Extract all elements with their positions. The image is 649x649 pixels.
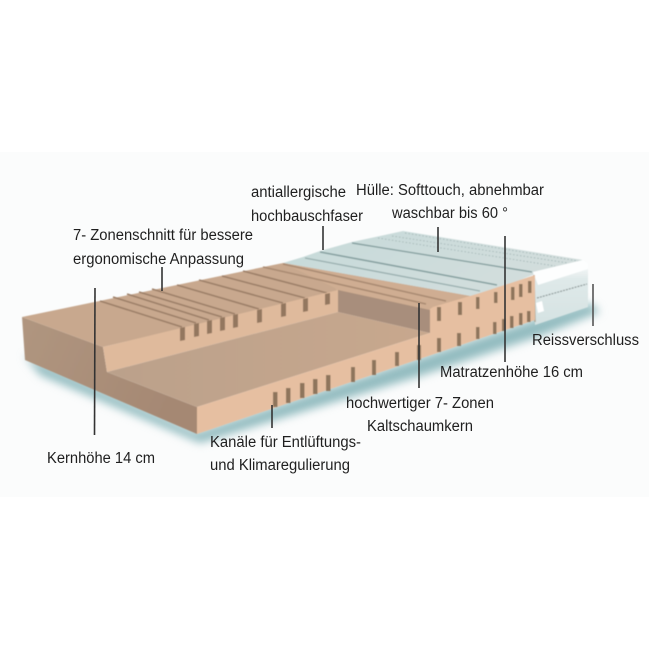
label: Kanäle: Kanäle für Entlüftungs- xyxy=(210,434,361,451)
foam: channels of lower row xyxy=(273,311,530,407)
foam: left side face xyxy=(22,317,197,434)
label: Kaltschaumkern: Kaltschaumkern xyxy=(367,418,473,435)
label: Hülle: waschbar bis 60 ° xyxy=(391,205,508,222)
mattress illustration xyxy=(22,231,588,434)
label: Zonenschnitt: 7- Zonenschnitt für bessere xyxy=(73,227,253,244)
label: Hülle: Hülle: Softtouch, abnehmbar xyxy=(356,182,544,199)
label: Matratzenhöhe: Matratzenhöhe 16 cm xyxy=(440,364,583,381)
foam: notches of upper row on right face xyxy=(437,281,532,321)
background panel xyxy=(0,152,649,497)
foam: lower floor xyxy=(107,312,430,407)
foam: lower front face xyxy=(197,275,535,434)
foam: front notches of upper step xyxy=(180,293,330,341)
label: Reissverschluss: Reissverschluss xyxy=(532,332,639,349)
foam: upper step top surface xyxy=(22,263,470,347)
foam: top grooves xyxy=(100,264,446,327)
label: antiallergische hochbauschfaser xyxy=(251,184,363,225)
cover: quilting and grooves xyxy=(305,233,578,291)
cover: top surface xyxy=(283,231,583,300)
foam: upper step front face xyxy=(103,290,338,372)
foam: right strip band xyxy=(283,263,470,312)
ground shadow xyxy=(24,303,600,443)
label: antiallergische hochbauschfaser: antiallergische xyxy=(251,184,346,201)
cover: side with zipper xyxy=(533,260,588,325)
label: antiallergische hochbauschfaser: hochbauschfaser xyxy=(251,208,363,225)
label: Kanäle: und Klimaregulierung xyxy=(210,457,350,474)
label: Zonenschnitt xyxy=(73,227,253,268)
label: Kaltschaumkern: hochwertiger 7- Zonen xyxy=(346,395,494,412)
label: Kaltschaumkern xyxy=(346,395,494,435)
foam: recessed back wall xyxy=(338,290,430,333)
callout lines xyxy=(94,226,593,435)
label: Kernhöhe: Kernhöhe 14 cm xyxy=(47,450,155,467)
label: Hülle xyxy=(356,182,544,222)
label: Kanäle xyxy=(210,434,361,474)
label: Zonenschnitt: ergonomische Anpassung xyxy=(73,251,244,268)
